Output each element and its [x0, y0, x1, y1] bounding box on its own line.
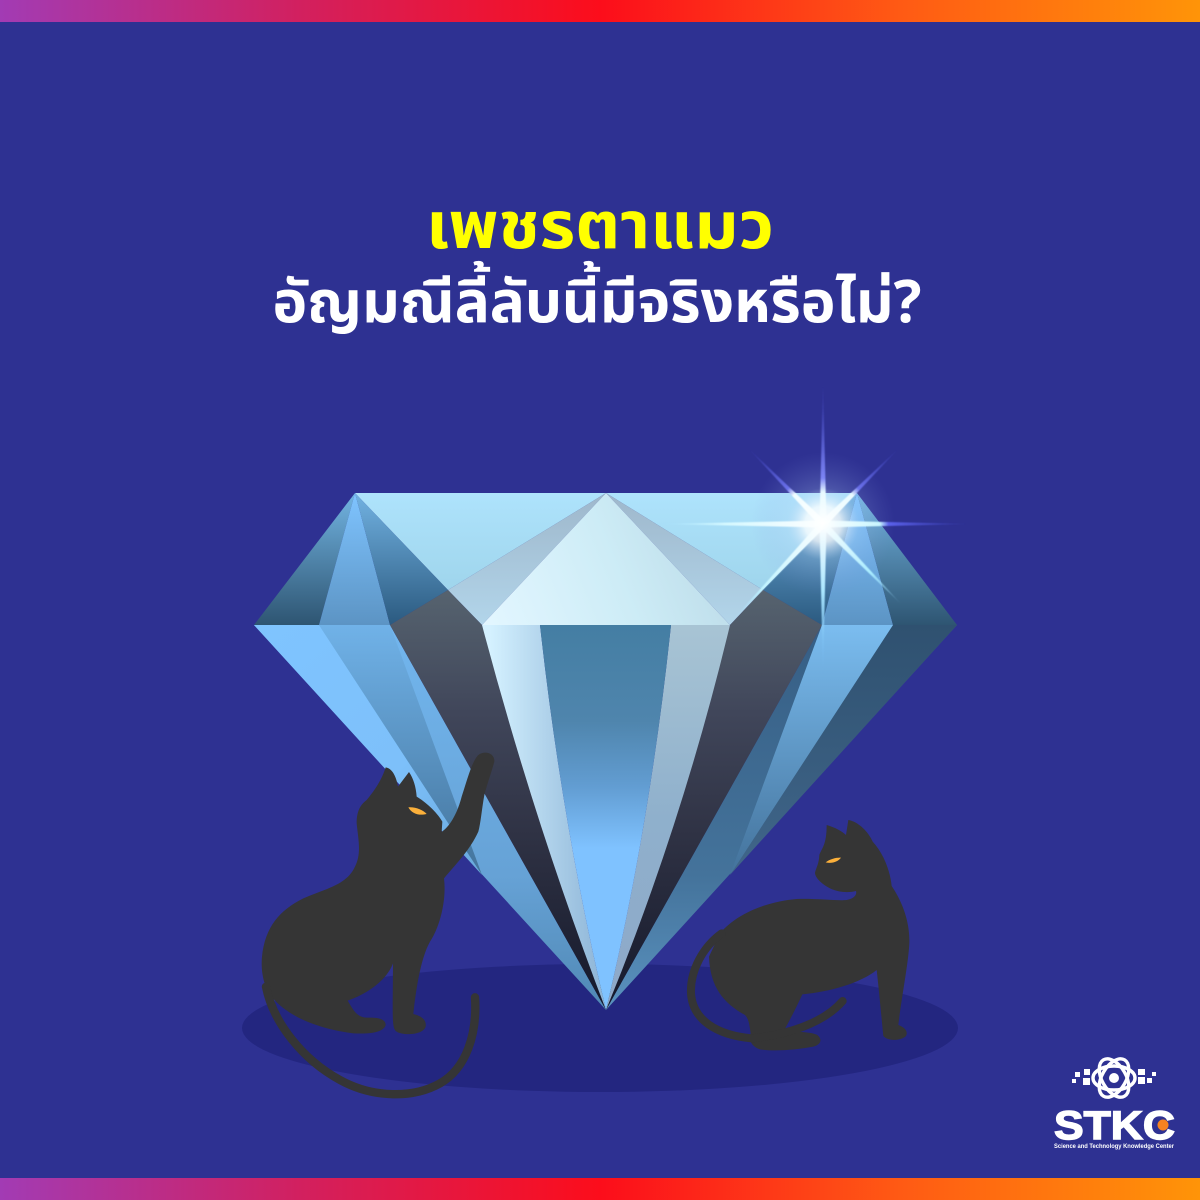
cat: right, looking back — [691, 820, 909, 1050]
crown facets — [254, 493, 957, 625]
heading: yellow: เพชรตาแมว — [426, 178, 774, 278]
cat tail — [266, 987, 475, 1094]
cat body — [709, 820, 909, 1050]
cat body — [262, 753, 494, 1034]
icon: atom — [1093, 1054, 1135, 1102]
ground shadow — [242, 964, 958, 1092]
logo dot — [1158, 1120, 1168, 1130]
cat: left, pawing the diamond — [262, 753, 494, 1094]
bottom gradient bar — [0, 1178, 1200, 1200]
pavilion facets — [254, 590, 957, 1010]
logo tagline: Science and Technology Knowledge Center — [1054, 1144, 1175, 1150]
diamond — [254, 493, 957, 1010]
icon: pixel squares — [1072, 1069, 1156, 1085]
cat eye — [408, 807, 427, 815]
cat eye — [826, 858, 841, 863]
sparkle — [660, 380, 972, 675]
logo wordmark: STKC — [1054, 1104, 1175, 1148]
cat tail — [691, 933, 843, 1038]
logo: STKC — [1054, 1054, 1175, 1150]
title — [272, 178, 922, 349]
heading: white: อัญมณีลี้ลับนี้มีจริงหรือไม่? — [272, 259, 922, 349]
top gradient bar — [0, 0, 1200, 22]
